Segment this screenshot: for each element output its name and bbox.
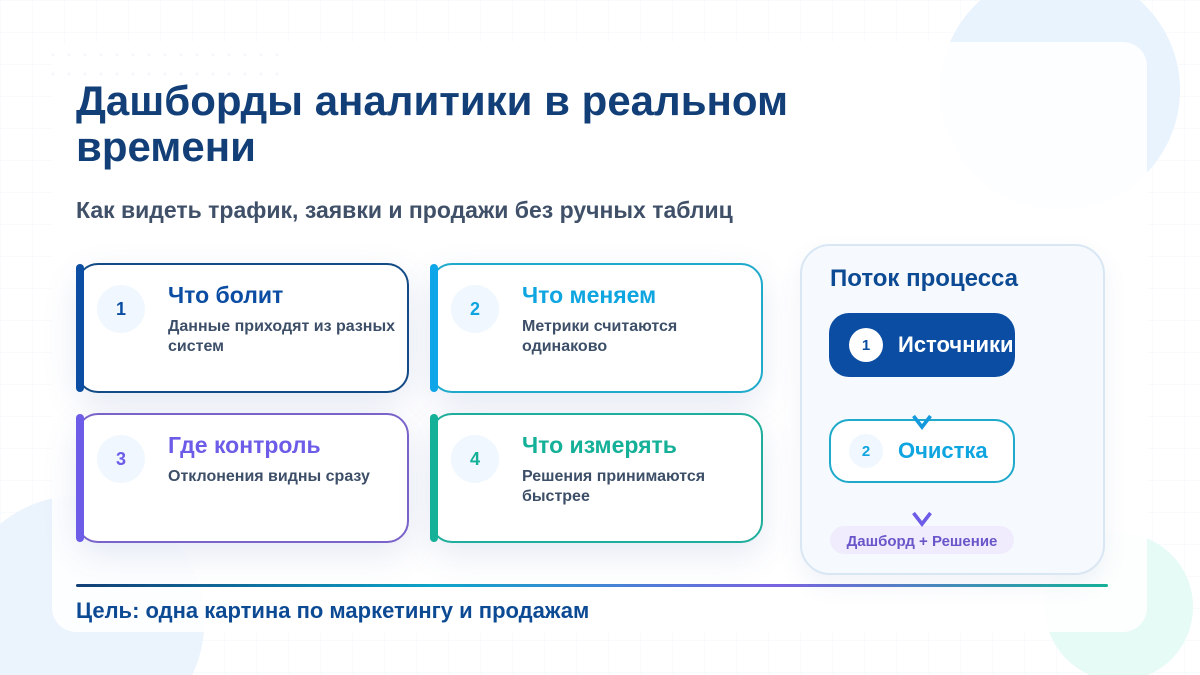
number badge: 3 [116, 449, 126, 469]
card heading: Что болит [168, 282, 283, 308]
number badge: 4 [470, 449, 480, 469]
number badge [97, 435, 145, 483]
arrow: step 1 to step 2 [912, 414, 932, 430]
step label: Очистка [898, 438, 988, 463]
number badge: 2 [470, 299, 480, 319]
card heading: Что измерять [522, 432, 677, 458]
card text: Метрики считаются одинаково [522, 318, 677, 355]
step number: 1 [862, 337, 870, 354]
footer goal text: Цель: одна картина по маркетингу и продажам [76, 598, 589, 623]
step number [849, 328, 883, 362]
accent bar [76, 414, 84, 542]
step label: Источники [898, 332, 1014, 357]
panel: process flow [800, 244, 1105, 575]
accent bar [76, 264, 84, 392]
step 3: дашборд + решение [830, 526, 1014, 554]
accent bar [430, 264, 438, 392]
title: времени [76, 123, 256, 170]
card 1: что болит [76, 263, 409, 393]
step number [849, 434, 883, 468]
card 3: где контроль [76, 413, 409, 543]
step 2: очистка [829, 419, 1015, 483]
card text: Решения принимаются быстрее [522, 468, 705, 505]
title [76, 77, 788, 170]
gradient divider line [76, 584, 1108, 587]
flow heading: Поток процесса [830, 265, 1018, 292]
step 1: источники [829, 313, 1015, 377]
number badge: 1 [116, 299, 126, 319]
number badge [451, 285, 499, 333]
main panel [52, 42, 1147, 632]
number badge [451, 435, 499, 483]
card text: Данные приходят из разных систем [168, 318, 395, 355]
subtitle: Как видеть трафик, заявки и продажи без ручных таблиц [76, 197, 733, 223]
dot pattern [52, 54, 278, 76]
card heading: Что меняем [522, 282, 656, 308]
title: Дашборды аналитики в реальном [76, 77, 788, 124]
step number: 2 [862, 443, 870, 460]
step 3: дашборд + решение: Дашборд + Решение [847, 533, 997, 550]
accent bar [430, 414, 438, 542]
number badge [97, 285, 145, 333]
card text: Отклонения видны сразу [168, 468, 370, 485]
card 2: что меняем [430, 263, 763, 393]
arrow: step 2 to step 3 [912, 512, 932, 527]
card 4: что измерять [430, 413, 763, 543]
card heading: Где контроль [168, 432, 321, 458]
